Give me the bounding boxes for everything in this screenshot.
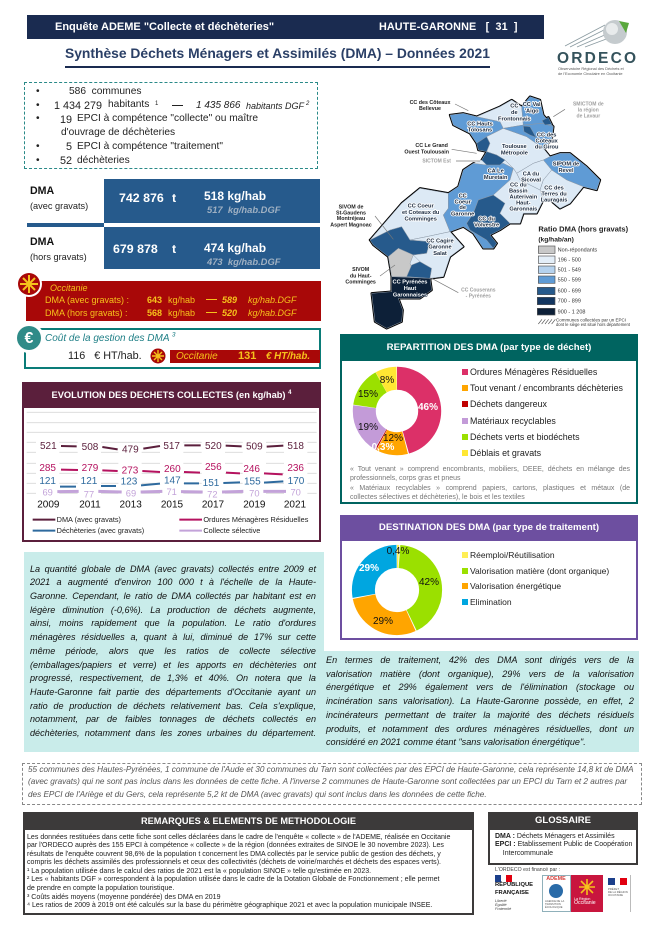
note: perimeter: des EPCI de l'Ariège et du Gers, cela représente 5,2 kt de DMA (avec gravats) qui sont inclus dans les données de cette fiche.: [28, 790, 487, 799]
line chart: 509: [246, 442, 263, 453]
donut chart: 29%: [373, 616, 393, 627]
unit: t: [172, 242, 176, 256]
map of Haute-Garonne: Garonne: [428, 244, 452, 250]
line chart: 246: [243, 464, 260, 475]
line chart: 508: [82, 442, 99, 453]
Occitanie cost band: € HT/hab.: [266, 351, 310, 362]
list of territory counts: d'ouvrage de déchèteries: [61, 127, 175, 138]
map of Haute-Garonne: CC du: [478, 216, 496, 222]
map of Haute-Garonne: Ratio DMA (hors gravats): [538, 225, 629, 234]
donut chart: 8%: [380, 375, 394, 386]
donut chart: 0,3%: [372, 442, 395, 453]
map of Haute-Garonne: Haut: [404, 286, 416, 292]
donut chart: 0,4%: [387, 546, 410, 557]
map of Haute-Garonne: Ouest Toulousain: [404, 149, 449, 155]
ratio DGF: 517 kg/hab.DGF: [207, 204, 280, 215]
methodology notes: Les données restituées dans cette fiche sont celles déclarées dans le cadre de l'enquête « collecte » de l'ADEME, réalisée en Occitanie: [27, 834, 450, 840]
list of territory counts: [36, 86, 310, 167]
line chart: 123: [121, 477, 138, 488]
methodology notes: ¹ La population utilisée dans le calcul des ratios de 2021 est la « population SINOE » telle qu'estimée en 2023.: [27, 868, 371, 875]
line hors gravats: kg/hab.DGF: [248, 308, 297, 318]
unit: t: [172, 191, 176, 205]
map of Haute-Garonne: CC des Côteaux: [410, 100, 450, 106]
glossary definitions: Intercommunale: [503, 850, 553, 857]
panel: methodology: [23, 812, 474, 915]
line chart: 2015: [161, 500, 184, 511]
panel heading: [23, 812, 474, 830]
text block: collection analysis: ratio de production de déchets relativement bas. Cela s'explique,: [30, 701, 316, 711]
methodology notes: ⁴ Les ratios de 2009 à 2019 ont été calculés sur la base du périmètre géographique 2021 et avec la population municipale INSEE.: [27, 902, 432, 909]
list of territory counts: •: [36, 100, 40, 111]
line chart: 260: [164, 464, 181, 475]
note: perimeter: (avec gravats) qui ne sont pas inclus dans les données de cette fiche. A l'inverse 2 communes de Haute-Garonne sont collectées par un EPCI du Tarn et 2 autres par: [28, 777, 627, 786]
line chart: 273: [122, 465, 139, 476]
logo: ORDECO: Observatoire Régional des Déchets et: [558, 66, 625, 71]
line chart: 69: [126, 488, 136, 498]
line chart: 279: [82, 463, 99, 474]
panel: management cost: [24, 328, 321, 369]
map of Haute-Garonne: 196 - 500: [558, 258, 581, 264]
map of Haute-Garonne: Toulouse: [502, 144, 527, 150]
line chart: 121: [39, 476, 56, 487]
methodology notes: résultats de l'enquête couvrent 98,6% de la population t concernent les DMA collectés par le service public de gestion des déchets, y: [27, 851, 441, 858]
map of Haute-Garonne: Comminges: [404, 216, 437, 222]
note: perimeter: [22, 763, 642, 805]
text block: collection analysis: progressé, respectivement, de 1,3% et 40%. On notera que la: [30, 673, 316, 683]
map of Haute-Garonne: Volvestre: [474, 223, 499, 229]
legend: Déblais et gravats: [470, 448, 541, 458]
text block: collection analysis: [24, 552, 324, 752]
map of Haute-Garonne: (kg/hab/an): [538, 236, 574, 243]
sublabel: (avec gravats): [30, 201, 88, 211]
panel: evolution chart: [22, 382, 321, 542]
line chart: 518: [287, 441, 304, 452]
legend: Matériaux recyclables: [470, 416, 556, 426]
legend: Valorisation énergétique: [470, 581, 561, 591]
logo: République Française: Égalité: [495, 903, 507, 907]
panel heading: REPARTITION DES DMA (par type de déchet): [387, 342, 591, 353]
text block: treatment analysis: incinérateurs permettant de traiter la majorité des déchets résiduels: [326, 710, 634, 720]
line avec gravats: [45, 295, 297, 305]
map of Haute-Garonne: Garonne: [451, 211, 474, 217]
line chart: 77: [84, 490, 94, 500]
line chart: 520: [205, 441, 222, 452]
ratio: 474 kg/hab: [204, 241, 266, 255]
tonnage: 742 876: [119, 191, 164, 205]
list of territory counts: •: [36, 141, 40, 152]
map of Haute-Garonne: Coeur: [454, 199, 472, 205]
panel: waste breakdown: [340, 334, 638, 504]
list of territory counts: 1 435 866: [196, 100, 240, 111]
map of Haute-Garonne: Bassin: [509, 189, 528, 195]
line chart: [26, 412, 317, 535]
line chart: 72: [207, 490, 218, 500]
map of Haute-Garonne: Communes collectées par un EPCI: [556, 318, 626, 323]
text block: collection analysis: même période, alors que les ratios de collecte sélective: [30, 646, 316, 656]
map of Haute-Garonne: Sicoval: [521, 178, 541, 184]
logo: ORDECO: ORDECO: [557, 50, 638, 67]
text block: collection analysis: ménagères résiduelles a, quant à lui, diminué de 17% sur cette: [30, 632, 316, 642]
panel: glossary: [488, 812, 638, 865]
separator: [27, 223, 104, 227]
map of Haute-Garonne: Bellevue: [419, 106, 441, 112]
map of Haute-Garonne: CA Le: [488, 169, 504, 175]
blue band: [104, 227, 320, 269]
map of Haute-Garonne: 'Aïgo: [525, 108, 539, 114]
header bar: [27, 15, 544, 39]
Occitanie heading: Occitanie: [50, 283, 88, 293]
map of Haute-Garonne: 700 - 899: [558, 299, 581, 305]
logo: ADEME: [542, 875, 571, 912]
legend: [462, 550, 609, 607]
department name: HAUTE-GARONNE [ 31 ]: [379, 21, 518, 33]
map of Haute-Garonne: 900 - 1 208: [558, 310, 585, 316]
line hors gravats: [45, 308, 297, 318]
list of territory counts: 586 communes: [69, 86, 141, 97]
map of Haute-Garonne: SICTOM Est: [422, 159, 451, 165]
map of Haute-Garonne: Garonnaises: [393, 292, 427, 298]
Occitanie cost band: 131: [238, 350, 256, 362]
list of territory counts: •: [36, 86, 40, 97]
map of Haute-Garonne: et Coteaux du: [402, 210, 440, 216]
panel: waste destination: [340, 515, 638, 640]
cost heading: Coût de la gestion des DMA 3: [45, 332, 176, 344]
logo: ORDECO: [557, 20, 638, 76]
line avec gravats: DMA (avec gravats) :: [45, 295, 129, 305]
map of Haute-Garonne: CC du: [510, 183, 527, 189]
line chart: 521: [40, 441, 57, 452]
list of territory counts: •: [36, 113, 40, 124]
panel heading: [488, 812, 638, 830]
panel heading: DESTINATION DES DMA (par type de traitement): [379, 522, 599, 533]
line chart: 70: [290, 488, 301, 498]
legend: Déchets verts et biodéchets: [470, 432, 580, 442]
list of territory counts: 1: [155, 101, 158, 107]
logo: ORDECO: de l'Economie Circulaire en Occitanie: [558, 71, 623, 76]
line avec gravats: 589: [222, 295, 237, 305]
line chart: 236: [287, 463, 304, 474]
map of Haute-Garonne: CC des: [537, 132, 556, 138]
text block: collection analysis: déchèteries, notamment dans les zones urbaines du département.: [30, 728, 316, 738]
map of Haute-Garonne: du Haut-: [350, 273, 372, 279]
line chart: 151: [203, 478, 220, 489]
map of Haute-Garonne: Tolosans: [468, 127, 492, 133]
list of territory counts: 5: [66, 141, 72, 153]
methodology notes: compris les déchets assimilés des professionnels et ceux des collectivités (déchets de voirie/marchés et déchets des espaces verts).: [27, 859, 441, 866]
legend: Tout venant / encombrants déchèteries: [470, 383, 623, 393]
text block: treatment analysis: [323, 651, 639, 752]
line chart: 479: [122, 445, 139, 456]
map of Haute-Garonne: CC des: [544, 185, 564, 191]
line chart: DMA (avec gravats): [57, 515, 121, 524]
panel: DMA avec gravats: [27, 179, 320, 227]
map of Haute-Garonne: Muretain: [484, 175, 508, 181]
line avec gravats: kg/hab: [168, 295, 195, 305]
methodology notes: par l'ORDECO auprès des 155 EPCI à compétence « collecte » de la région (données extraites de SINOE le 30 novembre 2023). Les: [27, 842, 444, 849]
line chart: 155: [244, 477, 261, 488]
map of Haute-Garonne: CA du: [523, 171, 540, 177]
list of territory counts: EPCI à compétence "traitement": [77, 141, 223, 152]
line chart: 2009: [37, 500, 60, 511]
map of Haute-Garonne: CC: [459, 193, 467, 199]
text block: collection analysis: notamment, par de faibles tonnages de déchets collectés en: [30, 714, 316, 724]
text block: collection analysis: ainsi, moins rapidement que la population. Le ratio d'ordures: [30, 618, 316, 628]
line hors gravats: 520: [222, 308, 237, 318]
ratio DGF: 473 kg/hab.DGF: [207, 256, 280, 267]
text block: treatment analysis: énergétique et 29% également vers de l'élimination (stockage ou: [326, 682, 634, 692]
map of Haute-Garonne: Coteaux: [536, 139, 559, 145]
line chart: 121: [81, 476, 98, 487]
chart heading: [22, 382, 321, 408]
map of Haute-Garonne: CC: [510, 104, 518, 110]
logo: ADEME: TRANSITION: [545, 903, 561, 906]
label: DMA: [30, 185, 54, 197]
map of Haute-Garonne: SIVOM de: [339, 205, 363, 211]
logo: République Française: Fraternité: [495, 907, 511, 911]
map of Haute-Garonne: CC Le Grand: [415, 143, 448, 149]
logo: République Française: RÉPUBLIQUE: [495, 882, 533, 888]
icon: euro: [17, 326, 42, 353]
title: [65, 45, 490, 68]
text block: collection analysis: 2021 a augmenté d'environ 100 000 t à l'échelle de la Haute-: [30, 577, 316, 587]
line chart: 69: [42, 488, 53, 498]
footnote: collectes sélectives et déchèteries), le bois et les textiles: [350, 494, 525, 501]
note: perimeter: 55 communes des Hautes-Pyrénées, 1 commune de l'Aude et 30 communes du Tarn sont collectées par des EPCI de Haute-Garonne, cela représente 14,8 kt de DMA: [28, 765, 634, 774]
map of Haute-Garonne: Métropole: [501, 150, 528, 156]
map of Haute-Garonne: la région: [578, 108, 599, 114]
map of Haute-Garonne: Haut-: [516, 200, 531, 206]
logo: République Française: [495, 875, 533, 911]
map of Haute-Garonne: Auterivain: [509, 195, 538, 201]
list of territory counts: EPCI à compétence "collecte" ou maître: [77, 113, 258, 124]
text block: collection analysis: légère diminution (-0,6%). La production de déchets augmente,: [30, 605, 316, 615]
donut chart: 15%: [358, 389, 378, 400]
text block: treatment analysis: valorisation matière (dont organique), 29% vers de la valorisation: [326, 669, 634, 679]
logo: Préfet: DE LA RÉGION: [608, 890, 628, 894]
list of territory counts: 1 434 279: [54, 100, 102, 112]
map of Haute-Garonne: 600 - 699: [558, 289, 581, 295]
Occitanie cost band: [170, 350, 320, 363]
donut chart: 46%: [418, 402, 438, 413]
text block: collection analysis: Haute-Garonne fait partie des départements d'Occitanie ayant un: [30, 687, 316, 697]
legend: Ordures Ménagères Résiduelles: [470, 367, 597, 377]
map of Haute-Garonne: CC Cagire: [426, 238, 454, 244]
map of Haute-Garonne: Garonnais: [509, 207, 537, 213]
map of Haute-Garonne: CC Hauts: [467, 121, 493, 127]
footnote: professionnels, corps gras et pneus: [350, 475, 461, 482]
panel heading: [340, 515, 638, 541]
donut chart: [352, 366, 442, 456]
text block: treatment analysis: En termes de traitement, 42% des DMA sont dirigés vers de la: [326, 655, 634, 665]
methodology notes: de prendre en compte la population touristique.: [27, 885, 174, 892]
map of Haute-Garonne: de Lavaur: [577, 114, 600, 120]
footnote: « Tout venant » comprend encombrants, mobiliers, DEEE, déchets en mélange des: [350, 466, 630, 473]
line chart: Collecte sélective: [203, 526, 260, 535]
list of territory counts: •: [36, 155, 40, 166]
map of Haute-Garonne: Revel: [558, 168, 574, 174]
icon: small Occitanie emblem: [150, 348, 166, 364]
line chart: 170: [288, 476, 305, 487]
blue band: [104, 179, 320, 223]
text block: collection analysis: (emballages/papiers et verre) et les apports en déchèteries ont: [30, 660, 316, 670]
line chart: 147: [164, 476, 181, 487]
line chart: 517: [163, 441, 180, 452]
legend: Déchets dangereux: [470, 399, 547, 409]
panel heading: REMARQUES & ELEMENTS DE METHODOLOGIE: [141, 816, 356, 826]
legend: Valorisation matière (dont organique): [470, 566, 609, 576]
text block: collection analysis: Garonne. Cependant, le ratio de DMA collectés par habitant est en: [30, 591, 316, 601]
map of Haute-Garonne: 501 - 549: [558, 268, 581, 274]
legend: Elimination: [470, 597, 512, 607]
footnote: [350, 466, 630, 501]
funders caption: L'ORDECO est financé par :: [495, 867, 560, 873]
cost value: 116 € HT/hab.: [68, 350, 142, 362]
sublabel: (hors gravats): [30, 252, 87, 262]
map of Haute-Garonne: Frontonnais: [498, 116, 531, 122]
list of territory counts: habitants DGF: [246, 101, 304, 111]
line hors gravats: 568: [147, 308, 162, 318]
donut chart: 12%: [383, 433, 403, 444]
list of territory counts: habitants: [108, 99, 149, 110]
panel: Occitanie comparison: [26, 281, 321, 321]
legend: [462, 367, 623, 458]
line chart: 2019: [243, 500, 266, 511]
donut chart: 19%: [358, 422, 378, 433]
map of Haute-Garonne: Salat: [433, 251, 447, 257]
methodology notes: ² Les « habitants DGF » correspondent à la population utilisée dans le cadre de la Dotation Globale de Fonctionnement ; elle permet: [27, 876, 440, 883]
line hors gravats: DMA (hors gravats) :: [45, 308, 128, 318]
map of Haute-Garonne: CC Pyrénées: [393, 280, 427, 286]
text block: collection analysis: La quantité globale de DMA (avec gravats) collectés entre 2009 et: [30, 564, 316, 574]
line chart: 285: [39, 463, 56, 474]
glossary definitions: [495, 832, 632, 857]
line chart: 2011: [79, 500, 101, 511]
footnote: « Matériaux recyclables » comprend papiers, cartons, plastiques et métaux (de: [350, 485, 630, 492]
line chart: 70: [249, 489, 260, 499]
list of territory counts: 2: [306, 101, 309, 107]
logo: République Française: FRANÇAISE: [495, 890, 529, 896]
map of Haute-Garonne: SMICTOM de: [573, 102, 604, 108]
glossary definitions: EPCI : Etablissement Public de Coopération: [495, 841, 632, 848]
text block: treatment analysis: produits, et notamment des ordures ménagères résiduelles, dont un: [326, 724, 634, 734]
line hors gravats: kg/hab: [168, 308, 195, 318]
map of Haute-Garonne: SIVOM: [352, 267, 370, 273]
text block: treatment analysis: incinération sans valorisation). La Haute-Garonne possède, en effet, 2: [326, 696, 634, 706]
map of Haute-Garonne: de: [459, 205, 466, 211]
ratio: 518 kg/hab: [204, 189, 266, 203]
map of Haute-Garonne: Montréjeau: [337, 216, 365, 222]
map of Haute-Garonne: SIPOM de: [553, 162, 579, 168]
text block: treatment analysis: considéré en 2021 comme étant "sans valorisation énergétique".: [326, 737, 586, 747]
line chart: 2013: [120, 500, 142, 511]
logo: Préfet: PRÉFET: [608, 887, 619, 891]
panel heading: GLOSSAIRE: [535, 815, 591, 826]
panel heading: [340, 334, 638, 361]
label: DMA: [30, 236, 54, 248]
chart heading: EVOLUTION DES DECHETS COLLECTES (en kg/hab) 4: [52, 390, 291, 400]
map of Haute-Garonne: dont le siège est situé hors département: [556, 322, 631, 327]
line avec gravats: 643: [147, 295, 162, 305]
Occitanie cost band: Occitanie: [176, 351, 218, 362]
logo: ADEME: AGENCE DE LA: [545, 900, 564, 903]
map of Haute-Garonne: CC Coeur: [408, 204, 435, 210]
title: Synthèse Déchets Ménagers et Assimilés (DMA) – Données 2021: [65, 45, 490, 61]
tonnage: 679 878: [113, 242, 158, 256]
donut chart: 42%: [419, 577, 439, 588]
glossary definitions: DMA : Déchets Ménagers et Assimilés: [495, 833, 615, 840]
panel: DMA hors gravats: [30, 227, 320, 269]
map of Haute-Garonne: - Pyrénées: [466, 294, 491, 300]
line chart: 256: [205, 462, 222, 473]
line chart: Ordures Ménagères Résiduelles: [203, 515, 309, 524]
donut chart: [352, 544, 442, 636]
logo: Région Occitanie: [571, 875, 603, 912]
logo: Région Occitanie: La Région: [574, 897, 590, 901]
map of Haute-Garonne: Non-répondants: [558, 248, 597, 254]
methodology notes: [27, 834, 450, 909]
line avec gravats: kg/hab.DGF: [248, 295, 297, 305]
map of Haute-Garonne: Comminges: [345, 280, 376, 286]
line chart: 71: [166, 487, 177, 497]
logo: Préfet: OCCITANIE: [608, 893, 623, 897]
map of Haute-Garonne: 550 - 599: [558, 278, 581, 284]
map of Haute-Garonne: Aspert Magnoac: [330, 222, 372, 228]
list of territory counts: déchèteries: [77, 155, 130, 166]
map of Haute-Garonne: CC Val: [523, 102, 541, 108]
methodology notes: ³ Coûts aidés moyens (moyenne pondérée) des DMA en 2019: [27, 894, 221, 901]
map of Haute-Garonne: du Girou: [535, 145, 559, 151]
panel: key figures: [24, 82, 318, 169]
line chart: 2017: [202, 500, 225, 511]
donut chart: 29%: [359, 563, 379, 574]
map of Haute-Garonne: de: [511, 110, 518, 116]
logo: ADEME: ÉCOLOGIQUE: [545, 906, 562, 909]
legend: Réemploi/Réutilisation: [470, 550, 555, 560]
logo: ADEME: ADEME: [546, 876, 566, 882]
list of territory counts: 19: [60, 114, 72, 126]
icon: Occitanie emblem: [18, 273, 42, 297]
map of Haute-Garonne: Lauragais: [541, 197, 567, 203]
map of Haute-Garonne: [330, 96, 631, 330]
logo: République Française: Liberté: [495, 899, 507, 903]
line chart: Déchèteries (avec gravats): [57, 526, 144, 535]
map of Haute-Garonne: Terres du: [541, 191, 567, 197]
map of Haute-Garonne: St-Gaudens: [336, 210, 366, 216]
logo: Région Occitanie: Occitanie: [574, 900, 596, 906]
logo: Préfet: [605, 875, 631, 912]
line chart: 2021: [284, 500, 307, 511]
icon: euro: €: [25, 330, 34, 347]
funders: [495, 867, 631, 912]
survey name: Enquête ADEME "Collecte et déchèteries": [55, 21, 274, 33]
map of Haute-Garonne: CC Couserans: [461, 287, 496, 293]
list of territory counts: 52: [60, 155, 72, 167]
